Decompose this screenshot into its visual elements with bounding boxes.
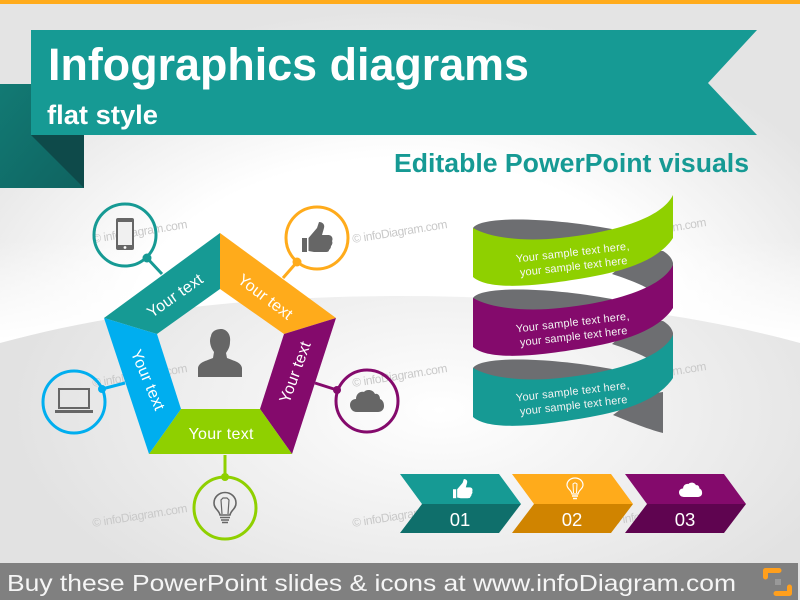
chevron 02: 02 (562, 509, 582, 530)
watermarks (91, 215, 707, 530)
ribbon: purple: Your sample text here, (515, 311, 630, 335)
watermarks: © infoDiagram.com (351, 217, 448, 246)
circle: cloud (333, 370, 398, 432)
segment labels: Your text (144, 271, 207, 322)
watermarks: © infoDiagram.com (610, 499, 707, 528)
icon: person (198, 329, 242, 377)
ribbon: purple (473, 265, 673, 356)
spiral ribbon (473, 195, 673, 433)
icon: thumb up (453, 479, 473, 498)
segment labels (127, 271, 315, 443)
footer text: Buy these PowerPoint slides & icons at www.infoDiagram.com (7, 570, 736, 596)
watermarks: © infoDiagram.com (610, 359, 707, 388)
segment labels: Your text (127, 347, 168, 414)
watermarks: © infoDiagram.com (91, 361, 188, 390)
chevron 03: 03 (675, 509, 695, 530)
ribbon: green: your sample text here (519, 255, 628, 279)
chevron 01: 01 (450, 509, 470, 530)
top accent bar (0, 0, 800, 4)
heading: editable visuals: Editable PowerPoint visuals (394, 150, 749, 178)
icon: light bulb (567, 478, 583, 498)
ribbon: purple: your sample text here (519, 325, 628, 349)
title: Infographics diagrams (48, 39, 529, 90)
ribbon: teal: Your sample text here, (515, 380, 630, 404)
circle: thumb up (286, 207, 348, 269)
circle: laptop (43, 371, 106, 433)
segment: teal (104, 233, 220, 334)
ribbon: green (473, 195, 673, 286)
chevron 02 (512, 474, 633, 533)
icon: cloud (679, 483, 702, 497)
title banner (31, 30, 757, 135)
segment: purple (260, 318, 336, 454)
watermarks: © infoDiagram.com (351, 361, 448, 390)
segment: green (149, 409, 292, 454)
logo (766, 570, 790, 594)
pentagon diagram (102, 233, 337, 477)
connector lines (102, 258, 337, 477)
footer bar (0, 563, 798, 600)
circle: light bulb (194, 473, 256, 539)
circle: phone (94, 204, 156, 266)
ribbon fold (0, 84, 84, 188)
segment: orange (220, 233, 336, 334)
ribbon: green: Your sample text here, (515, 241, 630, 265)
segment labels: Your text (277, 339, 315, 405)
segment labels: Your text (188, 426, 254, 443)
ribbon: teal (473, 335, 673, 426)
segment labels: Your text (234, 271, 296, 324)
watermarks: © infoDiagram.com (351, 501, 448, 530)
watermarks: © infoDiagram.com (91, 217, 188, 246)
segment: blue (104, 318, 181, 454)
chevron 03 (625, 474, 746, 533)
ribbon: teal: your sample text here (519, 394, 628, 418)
watermarks: © infoDiagram.com (610, 215, 707, 244)
watermarks: © infoDiagram.com (91, 501, 188, 530)
chevron 01 (400, 474, 521, 533)
grey ribbon backs (473, 220, 673, 433)
subtitle: flat style (47, 100, 158, 130)
